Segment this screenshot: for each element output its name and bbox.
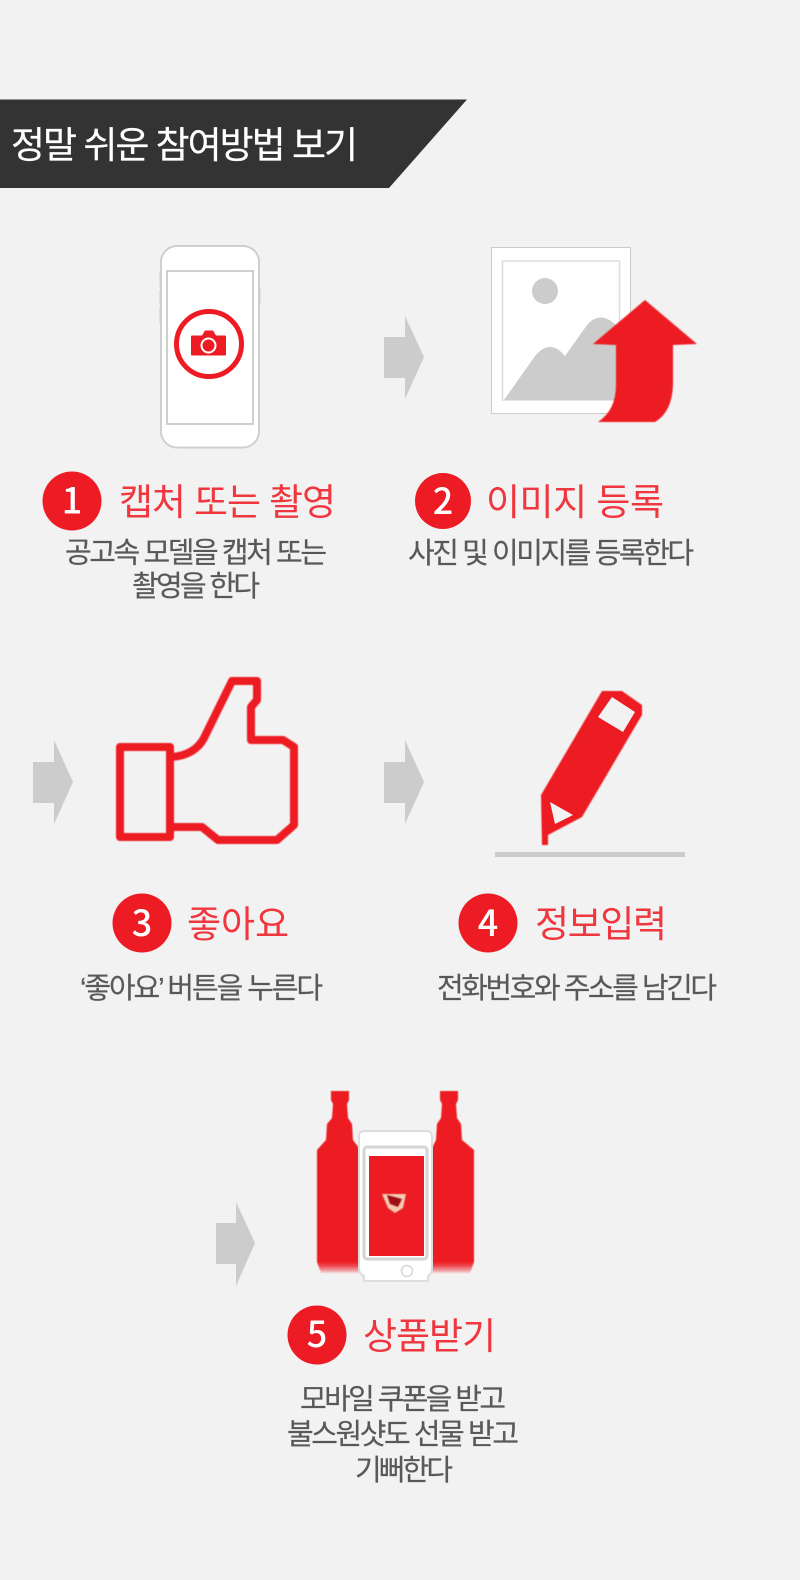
arrow: step 2 to 3 [33,740,73,824]
arrow: step 4 to 5 [216,1202,255,1286]
icon: thumbs up outline [120,681,294,840]
step 2 heading: 이미지 등록 [486,482,664,523]
step 2 number badge: 2 [433,473,453,525]
icon: bottles with phone [317,1091,474,1281]
icon: picture with upload arrow [492,248,697,422]
step 1 description: 공고속 모델을 캡처 또는 [65,538,327,570]
step 3 panel: like [80,681,323,1005]
step 1 panel: capture [42,246,336,603]
step 1 number badge: 1 [62,472,82,524]
step 5 number badge [288,1306,346,1364]
step 4 number badge: 4 [478,895,498,947]
step 1 description: 촬영을 한다 [132,570,260,603]
step 5 number badge: 5 [307,1306,327,1358]
step 5 heading: 상품받기 [363,1316,496,1357]
step 3 number badge: 3 [132,895,152,947]
step 4 heading: 정보입력 [535,904,667,945]
title text: 정말 쉬운 참여방법 보기 [11,115,358,169]
arrow: step 1 to 2 [384,316,424,399]
step 2 description: 사진 및 이미지를 등록한다 [408,538,694,570]
step 2 number badge [415,473,471,529]
step 5 description: 모바일 쿠폰을 받고 [300,1384,506,1416]
step 5 description: 불스원샷도 선물 받고 [287,1419,519,1451]
step 3 description: ‘좋아요’ 버튼을 누른다 [80,973,323,1005]
step 4 number badge [458,894,518,952]
icon: phone with camera [160,246,260,448]
step 4 description: 전화번호와 주소를 남긴다 [437,973,717,1005]
step 3 heading: 좋아요 [187,904,289,945]
step 2 panel: image upload [408,248,697,570]
step 1 number badge [42,472,102,530]
step 4 panel: enter information [437,691,717,1005]
arrow: step 3 to 4 [384,740,424,824]
step 1 heading: 캡처 또는 촬영 [119,482,336,523]
step 1 description [65,538,327,603]
icon: pencil on a line [495,691,685,857]
step 3 number badge [112,894,172,952]
step 5 description: 기뻐한다 [355,1455,453,1487]
step 5 description [287,1384,519,1487]
title banner [0,100,467,188]
step 5 panel: receive prize [287,1091,519,1487]
